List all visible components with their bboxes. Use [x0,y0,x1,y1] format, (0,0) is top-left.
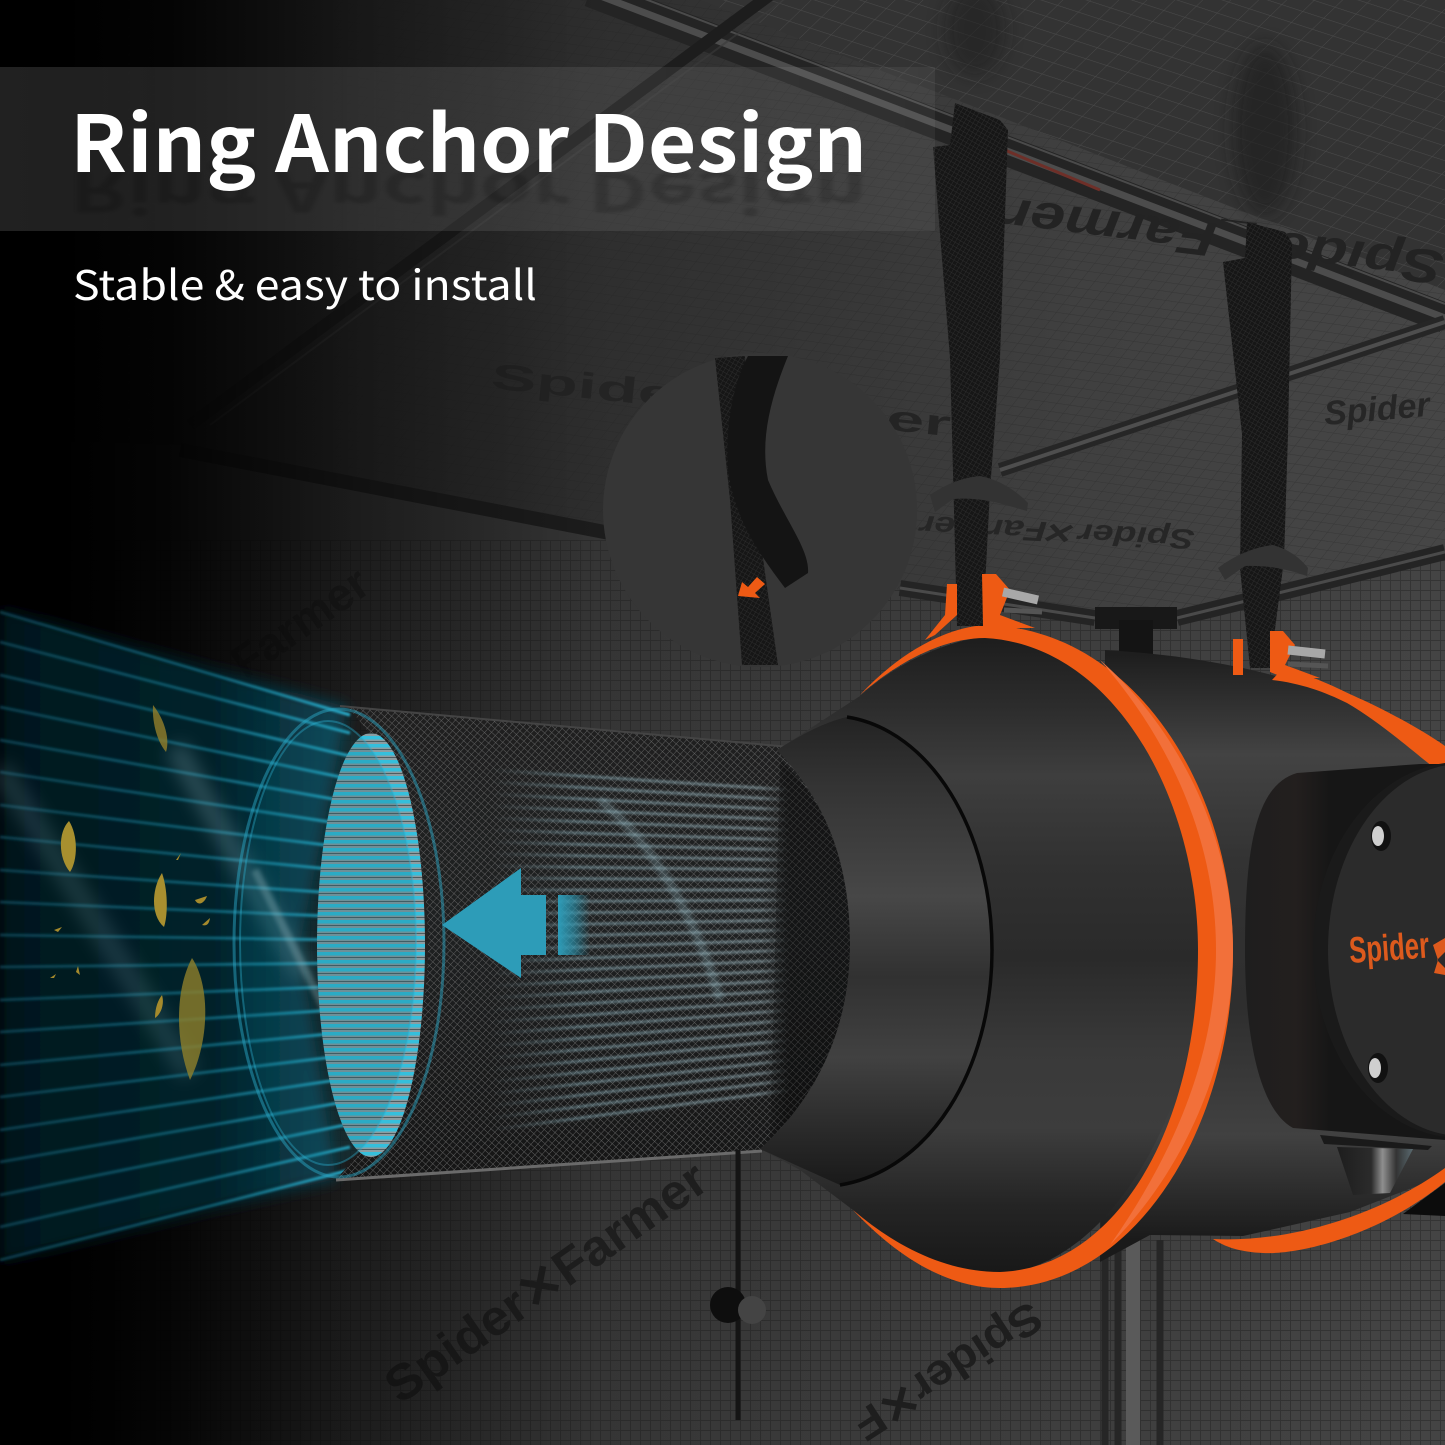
reducer collar [760,717,992,1185]
watermarks [221,187,1445,1445]
title band [0,67,935,231]
watermarks: Farmer [221,556,379,688]
orange anchor ring front [853,625,1233,1288]
air flow beams [0,608,350,1262]
pull cord [710,1150,766,1420]
title: Ring Anchor Design [70,83,867,195]
title shadow: Ring Anchor Design [70,156,867,234]
watermarks: Spider✕Farmer [374,1150,718,1414]
cable gland [1320,1135,1432,1195]
detail inset circle [603,353,917,667]
mesh carbon filter [336,706,850,1180]
fan motor housing [1245,762,1445,1195]
strap detail [715,356,778,665]
filter opening [234,709,444,1177]
watermarks: Spider✕Farmer [916,509,1195,555]
rear fan body and second ring [1100,650,1445,1262]
filter internal air lines [490,770,790,1130]
airflow arrow [442,868,590,978]
left fade to black [0,0,600,1445]
watermarks: Spider [1322,386,1433,433]
hanging strap right [1218,222,1328,678]
fan front dome [760,636,1200,1274]
watermarks: Spider Farmer [489,355,953,444]
brand logo mark [1433,938,1445,975]
small orange arrow [738,577,765,598]
watermarks: Spider_Farmer [1000,187,1445,294]
subtitle: Stable & easy to install [73,252,537,312]
clamp tabs and bolt [1233,631,1328,678]
leaves [50,705,210,1080]
hanging strap left [925,103,1042,640]
watermarks: Spider✕F [844,1292,1051,1445]
clamp tabs and bolt [925,574,1042,640]
